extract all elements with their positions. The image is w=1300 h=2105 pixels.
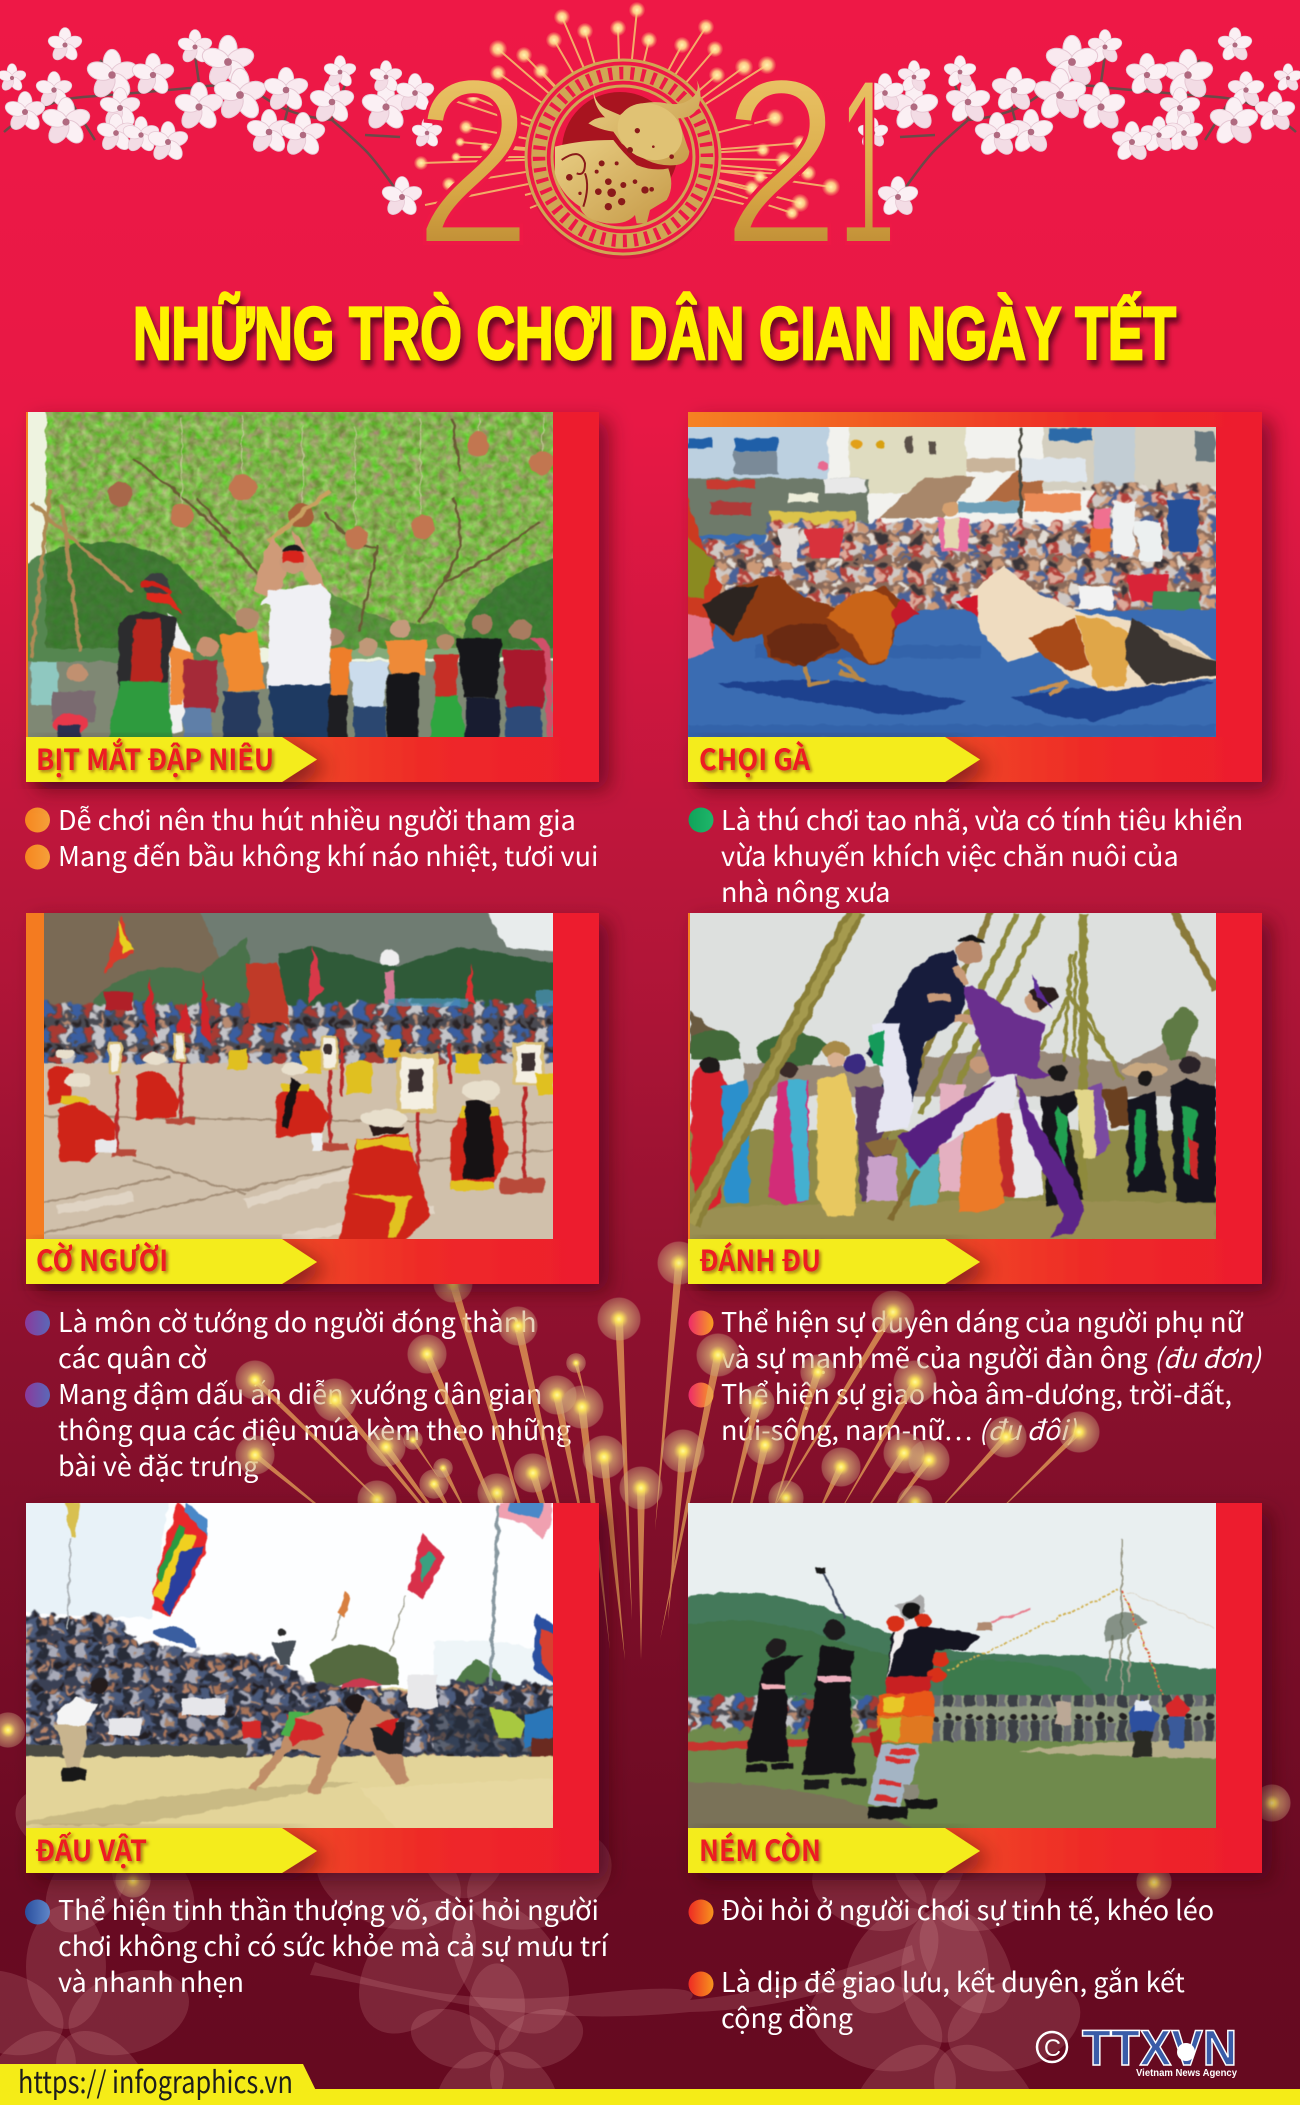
text block: bịt mắt đập niêu: Mang đến bầu không khí náo nhiệt, tươi vui: [58, 835, 598, 874]
panel: bịt mắt đập niêu: [9, 395, 599, 782]
footer bar with website: [0, 2058, 1300, 2105]
label bar: [26, 1828, 317, 1873]
medallion with golden ox: [525, 60, 721, 259]
woman on swing: [962, 985, 1051, 1080]
logo: TTXVN: TTXVN: [1082, 2020, 1237, 2076]
label bar: [26, 1239, 317, 1284]
text block: cờ người: Là môn cờ tướng do người đóng thành: [58, 1301, 537, 1340]
text block: bịt mắt đập niêu: [25, 799, 598, 874]
sparks around the medallion: [414, 2, 840, 220]
flags: [65, 1502, 79, 1538]
group of women: [691, 1063, 731, 1213]
watermark: plum blossoms at the bottom: [0, 1731, 1093, 2105]
text block: ném còn: [688, 1889, 1214, 2036]
digits 2 2 1: 2: [414, 30, 532, 294]
players in red: [48, 1040, 553, 1250]
text block: đánh đu: Thể hiện sự giao hòa âm-dương, trời-đất,: [721, 1373, 1232, 1412]
label bar: [688, 1828, 980, 1873]
heading: ĐẤU VẬT: [35, 1828, 147, 1870]
text block: đánh đu: Thể hiện sự duyên dáng của người phụ nữ: [721, 1301, 1244, 1340]
text block: bịt mắt đập niêu: Dễ chơi nên thu hút nhiều người tham gia: [58, 799, 576, 838]
text block: cờ người: Mang đậm dấu ấn diễn xướng dân gian: [58, 1373, 542, 1412]
text block: chọi gà: Là thú chơi tao nhã, vừa có tính tiêu khiển: [721, 799, 1243, 838]
text block: đánh đu: [688, 1301, 1263, 1448]
text block: cờ người: các quân cờ: [58, 1337, 207, 1376]
heading: BỊT MẮT ĐẬP NIÊU: [36, 737, 274, 779]
text block: ném còn: cộng đồng: [721, 1997, 853, 2036]
text block: chọi gà: vừa khuyến khích việc chăn nuôi của: [721, 835, 1179, 874]
logo: TTXVN: Vietnam News Agency: [1136, 2068, 1237, 2079]
text block: chọi gà: nhà nông xưa: [721, 871, 890, 910]
panel: đánh đu: [669, 900, 1262, 1284]
photo: còn throwing: [688, 1503, 1216, 1828]
wrestlers: [248, 1705, 351, 1793]
text block: ném còn: Là dịp để giao lưu, kết duyên, gắn kết: [721, 1961, 1185, 2000]
decoration: right blossom branch: [857, 28, 1300, 218]
fireworks behind the lower cards: [0, 1241, 1291, 1900]
text block: đấu vật: chơi không chỉ có sức khỏe mà cả sự mưu trí: [58, 1925, 610, 1964]
digits 2 2 1: [414, 30, 896, 294]
right rooster: [970, 565, 1216, 692]
year 2021 emblem: [414, 2, 896, 294]
text block: đấu vật: và nhanh nhẹn: [58, 1961, 244, 2000]
left rooster: [703, 575, 919, 667]
panel: cờ người: [9, 900, 599, 1284]
text block: đánh đu: và sự mạnh mẽ của người đàn ông (đu đơn): [721, 1337, 1263, 1376]
text block: đấu vật: [25, 1889, 610, 2000]
text block: cờ người: thông qua các điệu múa kèm theo những: [58, 1409, 571, 1448]
players: [118, 612, 176, 690]
text block: đấu vật: Thể hiện tinh thần thượng võ, đòi hỏi người: [58, 1889, 599, 1928]
label bar: [26, 737, 317, 782]
panel: chọi gà: [669, 395, 1262, 782]
heading: ĐÁNH ĐU: [699, 1238, 821, 1280]
photo: bamboo swing: [690, 913, 1216, 1239]
text block: đánh đu: núi-sông, nam-nữ… (đu đôi): [721, 1409, 1078, 1448]
text block: ném còn: Đòi hỏi ở người chơi sự tinh tế, khéo léo: [721, 1889, 1214, 1928]
photo: two fighting roosters and the crowd: [688, 427, 1216, 737]
heading: CỜ NGƯỜI: [36, 1238, 168, 1280]
dancers: [746, 1655, 804, 1762]
panel: ném còn: [669, 1485, 1262, 1873]
photo: blindfolded players and hanging pots: [28, 412, 553, 737]
footer bar with website: https:// infographics.vn: [18, 2058, 293, 2102]
photo: human chess: [44, 913, 553, 1239]
heading: CHỌI GÀ: [699, 737, 810, 779]
logo: TTXVN: C: [1044, 2035, 1061, 2062]
panel: đấu vật: [9, 1485, 599, 1873]
text block: cờ người: bài vè đặc trưng: [58, 1445, 258, 1484]
text block: chọi gà: [688, 799, 1243, 910]
referee: [58, 1698, 97, 1728]
decoration: left blossom branch: [0, 28, 443, 218]
photo: wrestlers in the sand ring: [26, 1503, 553, 1828]
digits 2 2 1: 2: [722, 30, 840, 294]
text: 1: [838, 30, 896, 294]
bamboo frame: [691, 910, 857, 1223]
heading: NÉM CÒN: [699, 1828, 821, 1870]
label bar: [688, 737, 980, 782]
label bar: [688, 1239, 980, 1284]
text block: cờ người: [25, 1301, 571, 1484]
man on swing: [866, 950, 966, 1103]
